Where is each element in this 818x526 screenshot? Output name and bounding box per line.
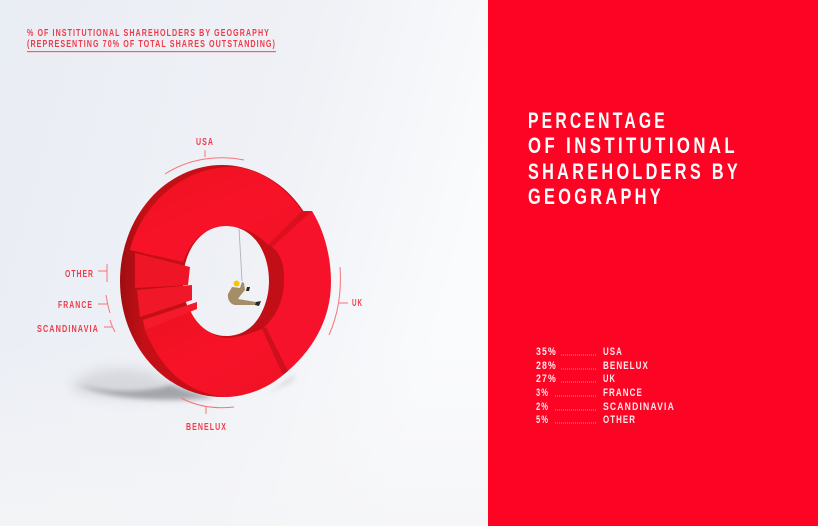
label: Benelux: BENELUX [186, 422, 227, 433]
label: USA: USA [196, 137, 214, 148]
rope [239, 228, 242, 281]
label: France: FRANCE [58, 300, 93, 311]
climber body [228, 282, 256, 305]
row: France [536, 387, 643, 399]
row: Scandinavia [536, 401, 675, 413]
label: Benelux [181, 398, 234, 433]
subtitle heading: (REPRESENTING 70% OF TOTAL SHARES OUTSTANDING) [27, 39, 276, 50]
label: France [58, 295, 110, 313]
data list [536, 346, 675, 426]
ring side wall [120, 165, 324, 397]
segment: Scandinavia [143, 302, 197, 330]
row: Scandinavia: SCANDINAVIA [603, 401, 675, 413]
segment: Benelux [145, 310, 283, 397]
label: USA [165, 137, 244, 174]
panel: red title background [488, 0, 818, 526]
row: Other: OTHER [603, 414, 636, 426]
segment: France [137, 285, 192, 317]
main title: PERCENTAGE [528, 108, 668, 133]
shadow under ring [72, 368, 296, 400]
Benelux step edge [262, 327, 288, 375]
label: UK: UK [352, 298, 363, 309]
Benelux inner wall [223, 245, 284, 338]
row: Other: 5% [536, 414, 549, 426]
row: UK [536, 373, 616, 385]
row: Other [536, 414, 636, 426]
UK step edge [268, 211, 312, 247]
figure: climber on rope [228, 228, 261, 306]
climber boots and gloves [246, 287, 261, 306]
segment: UK [262, 211, 331, 375]
chart: 3D donut [120, 165, 331, 397]
label: Scandinavia [37, 320, 115, 335]
main title: SHAREHOLDERS BY [528, 159, 741, 184]
climber helmet [234, 280, 240, 286]
row: Benelux [536, 360, 649, 372]
label: UK [329, 267, 363, 335]
row: France: 3% [536, 387, 549, 399]
row: UK: UK [603, 373, 616, 385]
main title [528, 108, 741, 209]
row: USA: 35% [536, 346, 557, 358]
row: Benelux: 28% [536, 360, 557, 372]
subtitle heading: % OF INSTITUTIONAL SHAREHOLDERS BY GEOGRAPHY [27, 28, 270, 39]
panel: photo background [0, 0, 488, 526]
row: USA: USA [603, 346, 623, 358]
label: Other: OTHER [65, 269, 94, 280]
label: Other [65, 264, 107, 282]
segment: Other [135, 253, 190, 288]
subtitle heading [27, 28, 276, 52]
main title: GEOGRAPHY [528, 184, 664, 209]
segment: USA [130, 167, 302, 262]
row: Benelux: BENELUX [603, 360, 649, 372]
label: Scandinavia: SCANDINAVIA [37, 324, 99, 335]
row: USA [536, 346, 623, 358]
row: France: FRANCE [603, 387, 643, 399]
row: Scandinavia: 2% [536, 401, 549, 413]
row: UK: 27% [536, 373, 557, 385]
main title: OF INSTITUTIONAL [528, 133, 738, 158]
